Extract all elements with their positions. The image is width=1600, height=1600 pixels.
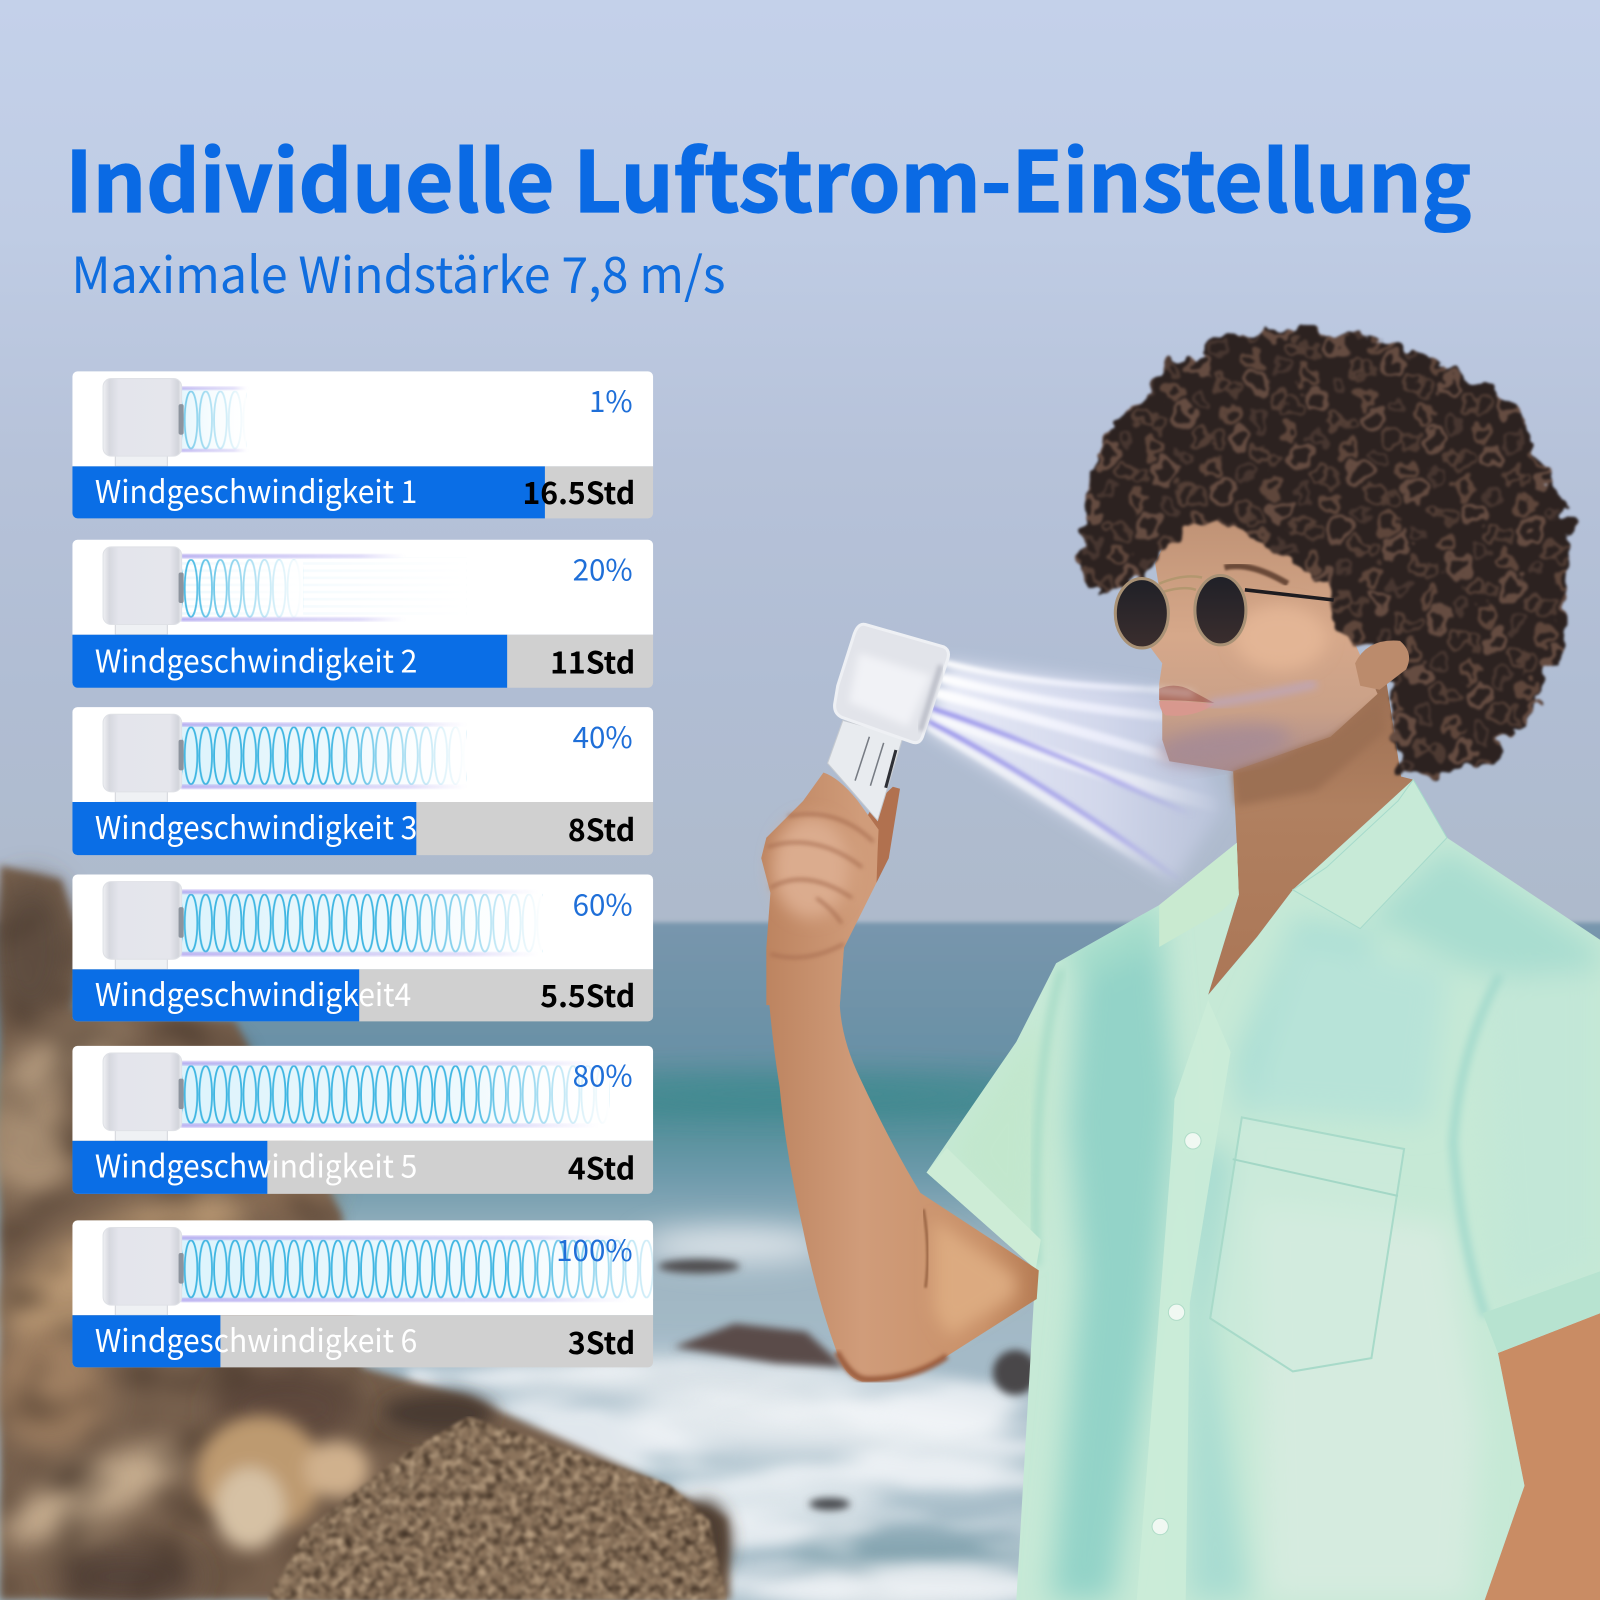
fan icon 3 — [103, 714, 184, 802]
textured foreground rock — [267, 1416, 727, 1600]
face shadow under jaw — [1233, 700, 1386, 806]
progress bar 5: 4Std — [568, 1145, 635, 1189]
hair edge curls — [1079, 326, 1571, 767]
fan icon 4 — [103, 882, 184, 969]
airflow rings 3 — [181, 722, 466, 789]
right arm — [1485, 1313, 1600, 1600]
percentage 3: 40% — [573, 714, 633, 757]
progress bar 2: 11Std — [550, 638, 635, 682]
sunglasses — [1115, 576, 1334, 648]
percentage 2: 20% — [573, 547, 633, 590]
blurred coastal rocks — [0, 865, 731, 1600]
man — [761, 326, 1600, 1600]
afro hair — [1079, 326, 1571, 777]
hand highlight — [772, 816, 850, 918]
progress bar 5 — [72, 1141, 653, 1194]
forearm lower shadow — [837, 1352, 947, 1380]
panel: speed 6 — [72, 1220, 653, 1367]
fan body — [835, 624, 948, 743]
ear — [1355, 640, 1409, 690]
percentage 6: 100% — [556, 1227, 633, 1270]
fan handle details — [855, 737, 884, 786]
hand — [761, 772, 879, 1005]
progress bar 3 — [72, 802, 653, 855]
progress bar 4 — [72, 969, 653, 1021]
panel: speed 3 — [72, 707, 653, 855]
airflow rings 2 — [181, 554, 466, 621]
panel: speed 1 — [72, 371, 653, 518]
airflow from fan to face — [928, 663, 1224, 884]
shirt buttons — [1152, 1133, 1201, 1535]
fan nozzle shade — [920, 665, 941, 731]
progress bar 4: 5.5Std — [540, 972, 635, 1016]
progress bar 6: 3Std — [568, 1319, 635, 1363]
airflow strands — [931, 663, 1220, 883]
upper lip — [1159, 686, 1214, 703]
title: Individuelle Luftstrom-Einstellung — [65, 116, 1471, 237]
percentage 4: 60% — [573, 881, 633, 924]
left collar — [1159, 843, 1239, 947]
handheld fan — [828, 624, 948, 820]
panel: speed 2 — [72, 540, 653, 688]
airflow rings 1 — [181, 387, 247, 452]
cheek highlight — [1235, 605, 1327, 670]
airflow rings 6 — [181, 1236, 653, 1302]
airflow rings 4 — [181, 890, 543, 956]
glasses temple — [1245, 590, 1334, 600]
progress bar 4: Windgeschwindigkeit4 — [95, 970, 411, 1016]
progress bar 1 — [72, 466, 653, 518]
eyebrow — [1224, 566, 1288, 584]
progress bar 1: 16.5Std — [522, 469, 635, 513]
sea — [0, 922, 1600, 1600]
shirt pocket — [1210, 1117, 1404, 1371]
finger creases — [767, 814, 873, 957]
progress bar 5: Windgeschwindigkeit 5 — [95, 1142, 417, 1188]
lower lip — [1159, 701, 1214, 716]
fan handle — [828, 720, 903, 820]
shirt — [927, 780, 1600, 1600]
left lens — [1115, 579, 1168, 648]
percentage 5: 80% — [573, 1053, 633, 1096]
progress bar 2: Windgeschwindigkeit 2 — [95, 636, 417, 682]
subtitle: Maximale Windstärke 7,8 m/s — [71, 236, 726, 308]
glasses bridge — [1159, 576, 1202, 592]
wind band over lips and jaw — [1153, 684, 1316, 704]
panel: speed 4 — [72, 874, 653, 1021]
progress bar 1: Windgeschwindigkeit 1 — [95, 467, 417, 513]
sleeve seam shadow — [1453, 974, 1500, 1316]
stubble and wind tint on chin — [1156, 717, 1293, 772]
fan highlight — [849, 653, 931, 727]
left forearm — [766, 948, 1039, 1382]
dark rocks in the water — [658, 1259, 1038, 1510]
right collar — [1293, 780, 1447, 929]
back of hand behind fan handle — [837, 787, 900, 898]
progress bar 3: Windgeschwindigkeit 3 — [95, 803, 417, 849]
progress bar 3: 8Std — [568, 806, 635, 850]
breaking waves and foam — [408, 1080, 1041, 1600]
progress bar 6 — [72, 1315, 653, 1367]
neck — [1208, 684, 1413, 995]
percentage 1: 1% — [589, 378, 633, 421]
airflow rings 5 — [181, 1061, 609, 1128]
panel: speed 5 — [72, 1046, 653, 1194]
fan icon 6 — [103, 1228, 184, 1315]
fan icon 2 — [103, 547, 184, 635]
shirt shading folds — [927, 847, 1600, 1600]
fan icon 1 — [103, 379, 184, 466]
sleeve cuffs — [1483, 1271, 1600, 1353]
shirt placket — [1143, 1044, 1230, 1600]
elbow crease — [923, 1209, 928, 1288]
right lens — [1195, 576, 1246, 645]
progress bar 2 — [72, 635, 653, 688]
sky background — [0, 0, 1600, 931]
progress bar 6: Windgeschwindigkeit 6 — [95, 1316, 417, 1362]
upper arm highlight — [934, 1219, 1015, 1337]
jaw and face — [1150, 500, 1378, 771]
fan icon 5 — [103, 1053, 184, 1141]
